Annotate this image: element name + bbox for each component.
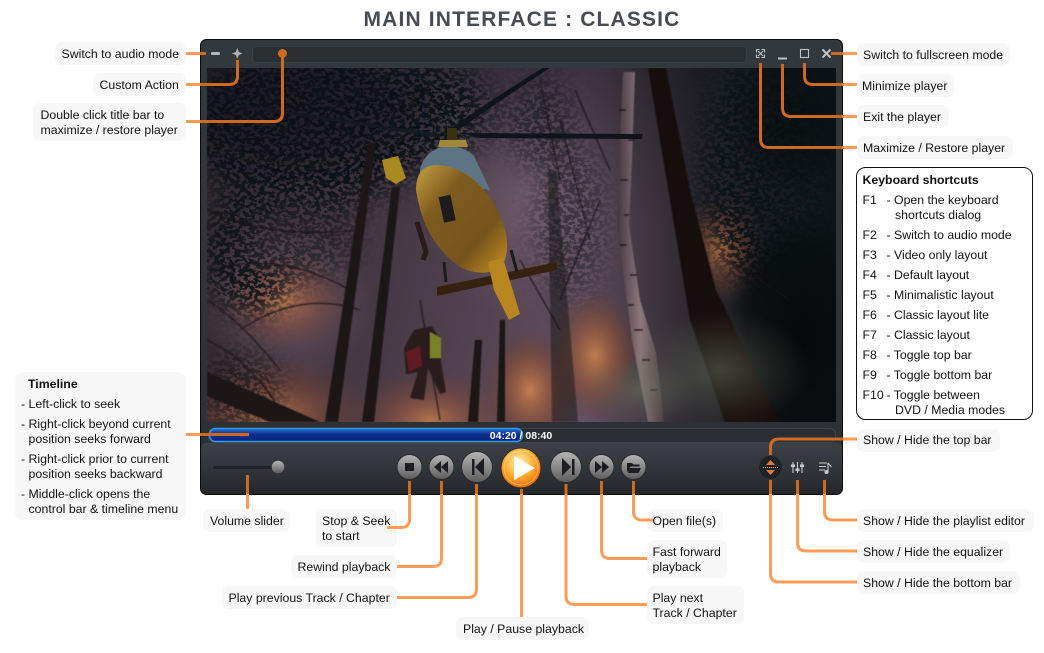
panel: timeline help: - Right-click beyond current bbox=[21, 417, 171, 431]
label: Play / Pause bbox=[456, 617, 589, 640]
arrow: timeline bbox=[186, 433, 249, 436]
button: toggle bars bbox=[758, 456, 782, 480]
label: playlist editor bbox=[857, 509, 1034, 532]
panel: keyboard shortcuts: F10 bbox=[862, 388, 884, 402]
label: Switch to fullscreen mode bbox=[857, 43, 1010, 66]
panel: timeline help: - Left-click to seek bbox=[21, 397, 121, 411]
label: Double click title bar: maximize / restore player bbox=[40, 123, 178, 137]
tree trunks and branches bbox=[207, 68, 800, 422]
panel: keyboard shortcuts: shortcuts dialog bbox=[895, 208, 981, 222]
arrow: rewind bbox=[397, 481, 442, 566]
panel: timeline help: control bar & timeline menu bbox=[28, 502, 178, 516]
button: rewind bbox=[429, 454, 454, 480]
title: MAIN INTERFACE : CLASSIC bbox=[364, 8, 680, 31]
label: Play next bbox=[647, 586, 744, 624]
arrow: equalizer bbox=[798, 480, 857, 551]
label: Rewind playback: Rewind playback bbox=[298, 560, 391, 574]
label: playlist editor: Show / Hide the playlist editor bbox=[863, 514, 1025, 528]
label: Rewind playback bbox=[291, 555, 397, 578]
panel: keyboard shortcuts: F2 bbox=[862, 228, 877, 242]
label: equalizer bbox=[857, 540, 1010, 563]
timeline: 04:20 / 08:40 bbox=[490, 430, 552, 442]
label: Stop & Seek: to start bbox=[322, 529, 360, 543]
arrow: bottom bar bbox=[770, 480, 857, 582]
arrow: stop bbox=[387, 481, 410, 528]
panel: timeline help: Timeline bbox=[28, 377, 78, 391]
label: Custom Action: Custom Action bbox=[100, 78, 179, 92]
panel: keyboard shortcuts: F1 bbox=[862, 193, 877, 207]
arrow: play bbox=[520, 489, 523, 617]
label: Play previous: Play previous Track / Chapter bbox=[228, 591, 390, 605]
panel: keyboard shortcuts: - Toggle bottom bar bbox=[886, 368, 992, 382]
panel: keyboard shortcuts: Keyboard shortcuts bbox=[862, 173, 979, 187]
arrow: minimize bbox=[804, 63, 857, 84]
label: Open files: Open file(s) bbox=[652, 514, 716, 528]
label: Minimize player bbox=[857, 74, 954, 97]
dark tree canopy bbox=[207, 68, 836, 422]
panel: keyboard shortcuts: - Default layout bbox=[886, 268, 970, 282]
panel: keyboard shortcuts: F3 bbox=[862, 248, 877, 262]
label: Open files bbox=[647, 509, 723, 532]
arrow: audio mode bbox=[186, 52, 206, 55]
arrow: fullscreen bbox=[831, 52, 857, 55]
label: Play next: Play next bbox=[652, 591, 704, 605]
panel: keyboard shortcuts: - Toggle top bar bbox=[886, 348, 972, 362]
panel: keyboard shortcuts: DVD / Media modes bbox=[895, 403, 1005, 417]
label: Double click title bar bbox=[33, 103, 186, 141]
control bar bbox=[201, 443, 842, 494]
icons: window buttons left bbox=[211, 48, 242, 59]
label: Volume slider: Volume slider bbox=[210, 514, 284, 528]
arrow: custom action bbox=[186, 60, 238, 84]
panel: keyboard shortcuts bbox=[856, 168, 1032, 420]
title bar slot bbox=[252, 46, 746, 62]
panel: keyboard shortcuts: F4 bbox=[862, 268, 877, 282]
arrow: volume bbox=[246, 475, 249, 509]
button: open file bbox=[621, 454, 646, 480]
panel: timeline help: position seeks forward bbox=[28, 432, 151, 446]
panel: keyboard shortcuts: - Toggle between bbox=[886, 388, 980, 402]
panel: timeline help bbox=[15, 372, 186, 520]
label: top bar: Show / Hide the top bar bbox=[863, 433, 992, 447]
button: stop bbox=[397, 454, 422, 480]
label: Custom Action bbox=[93, 73, 186, 96]
icons: window buttons right bbox=[756, 50, 830, 58]
button: previous bbox=[462, 452, 492, 482]
button: next bbox=[550, 452, 582, 482]
label: bottom bar bbox=[857, 571, 1020, 594]
label: Minimize player: Minimize player bbox=[862, 79, 947, 93]
panel: timeline help: - Right-click prior to current bbox=[21, 452, 169, 466]
label: Fast forward: playback bbox=[652, 560, 702, 574]
button: play bbox=[501, 448, 541, 488]
label: Stop & Seek bbox=[316, 509, 397, 547]
label: Stop & Seek: Stop & Seek bbox=[322, 514, 391, 528]
label: Switch to audio mode: Switch to audio mode bbox=[62, 47, 179, 61]
label: Exit the player: Exit the player bbox=[863, 110, 941, 124]
large dark trunk bbox=[648, 68, 780, 422]
panel: keyboard shortcuts: - Open the keyboard bbox=[886, 193, 999, 207]
label: Maximize / Restore player bbox=[857, 136, 1013, 159]
label: Fast forward bbox=[647, 540, 727, 578]
label: Double click title bar: Double click title bar to bbox=[40, 108, 164, 122]
label: Play previous bbox=[222, 586, 397, 609]
panel: keyboard shortcuts: - Classic layout bbox=[886, 328, 970, 342]
panel: keyboard shortcuts: - Classic layout lite bbox=[886, 308, 989, 322]
panel: keyboard shortcuts: F6 bbox=[862, 308, 877, 322]
arrow: maximize bbox=[760, 63, 857, 148]
panel: player window bbox=[180, 40, 875, 494]
label: Play / Pause: Play / Pause playback bbox=[463, 622, 585, 636]
icon: equalizer bbox=[792, 462, 804, 473]
button: fast forward bbox=[589, 454, 614, 480]
arrow: title bar bbox=[186, 49, 287, 122]
panel: keyboard shortcuts: F5 bbox=[862, 288, 877, 302]
panel: timeline help: - Middle-click opens the bbox=[21, 487, 150, 501]
arrow: open bbox=[634, 481, 653, 520]
panel: keyboard shortcuts: - Video only layout bbox=[886, 248, 988, 262]
label: Fast forward: Fast forward bbox=[652, 545, 721, 559]
label: Switch to audio mode bbox=[55, 42, 186, 65]
label: Switch to fullscreen mode: Switch to fullscreen mode bbox=[863, 48, 1003, 62]
arrow: fast forward bbox=[602, 481, 647, 558]
panel: keyboard shortcuts: F7 bbox=[862, 328, 877, 342]
panel: keyboard shortcuts: F8 bbox=[862, 348, 877, 362]
panel: timeline help: position seeks backward bbox=[28, 467, 163, 481]
hanging person bbox=[404, 326, 446, 400]
helicopter bbox=[241, 66, 643, 320]
timeline bbox=[208, 428, 836, 442]
arrow: next bbox=[566, 484, 647, 604]
volume slider bbox=[213, 461, 284, 473]
label: equalizer: Show / Hide the equalizer bbox=[863, 545, 1003, 559]
arrow: playlist bbox=[824, 480, 857, 520]
label: Volume slider bbox=[203, 509, 290, 532]
label: top bar bbox=[857, 429, 1000, 452]
label: Maximize / Restore player: Maximize / Restore player bbox=[863, 141, 1005, 155]
video frame: helicopter in forest bbox=[207, 68, 836, 422]
arrow: previous bbox=[397, 484, 476, 598]
label: Exit the player bbox=[857, 105, 949, 128]
panel: keyboard shortcuts: F9 bbox=[862, 368, 877, 382]
label: Play next: Track / Chapter bbox=[652, 606, 737, 620]
birch trunk bbox=[617, 72, 664, 422]
panel: keyboard shortcuts: - Switch to audio mode bbox=[886, 228, 1012, 242]
arrow: exit bbox=[782, 64, 857, 116]
icon: playlist bbox=[819, 463, 832, 474]
panel: keyboard shortcuts: - Minimalistic layout bbox=[886, 288, 994, 302]
arrow: top bar bbox=[770, 439, 857, 455]
label: bottom bar: Show / Hide the bottom bar bbox=[863, 576, 1012, 590]
